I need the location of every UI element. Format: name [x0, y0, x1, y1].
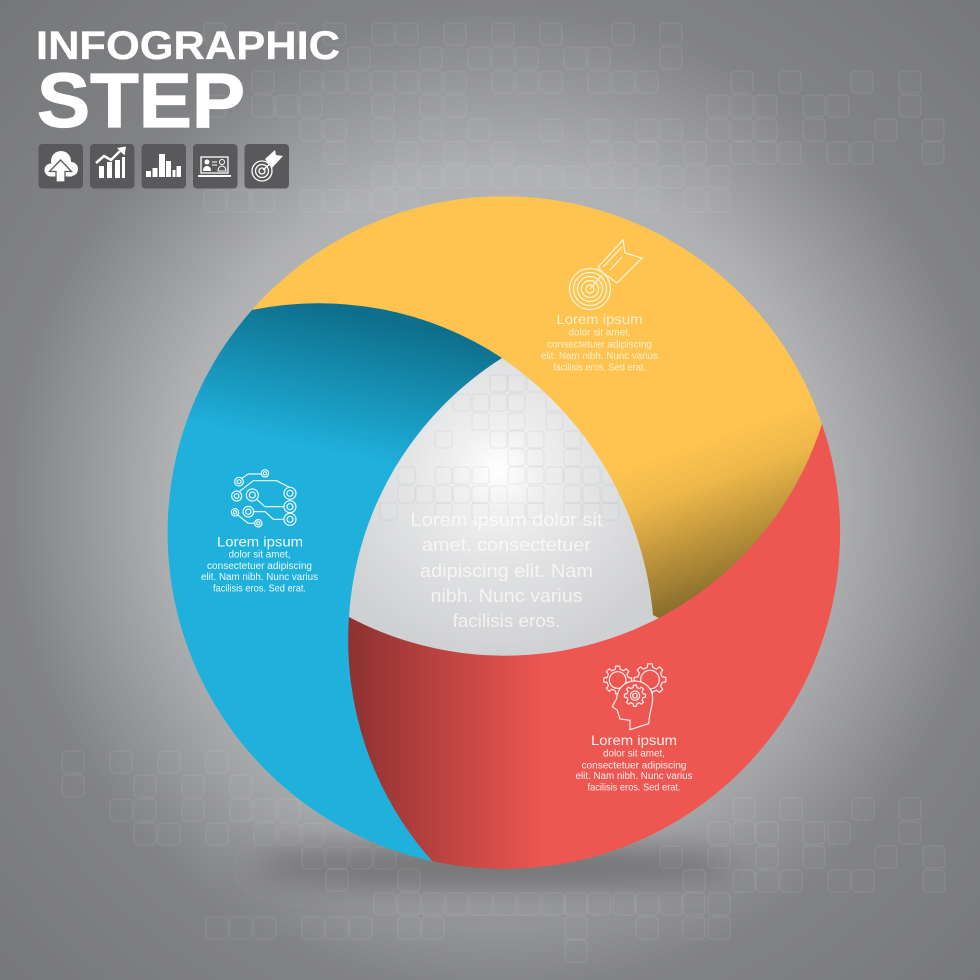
- icon: target and arrow: [570, 240, 642, 310]
- red text block: Lorem ipsum: [591, 732, 677, 748]
- tile pattern: bottom: [206, 847, 730, 962]
- icon row: [38, 144, 289, 188]
- tile pattern: upper right: [707, 71, 944, 164]
- tile pattern: lower right: [660, 798, 945, 892]
- ground shadow: [250, 846, 740, 886]
- red text block: elit. Nam nibh. Nunc varius: [576, 771, 692, 782]
- blue text block: dolor sit amet,: [228, 550, 290, 560]
- center panel: [204, 233, 804, 833]
- yellow text block: dolor sit amet,: [568, 328, 630, 338]
- panel: red segment: [348, 424, 840, 869]
- blue text block: facilisis eros. Sed erat.: [213, 584, 306, 594]
- tile pattern: lower left: [62, 751, 324, 845]
- yellow text block: consectetuer adipiscing: [547, 340, 652, 350]
- red text block: [576, 732, 692, 794]
- center text: [410, 509, 602, 631]
- center text: adipiscing elit. Nam: [420, 560, 593, 581]
- icon: bar chart: [142, 144, 186, 188]
- center text: nibh. Nunc varius: [430, 585, 582, 606]
- icon: cloud upload: [38, 144, 83, 188]
- red text block: dolor sit amet,: [603, 748, 665, 760]
- panel: yellow segment: [252, 196, 822, 640]
- red text block: facilisis eros. Sed erat.: [588, 782, 680, 794]
- center text: amet, consectetuer: [422, 534, 591, 555]
- yellow text block: facilisis eros. Sed erat.: [553, 362, 646, 374]
- icon: laptop video call: [193, 144, 238, 188]
- blue text block: Lorem ipsum: [217, 534, 303, 550]
- center text: Lorem ipsum dolor sit: [410, 509, 602, 530]
- panel: blue segment: [168, 303, 502, 861]
- center tile pattern: [380, 375, 619, 520]
- icon: head with gears: [604, 664, 666, 730]
- blue text block: consectetuer adipiscing: [207, 561, 312, 572]
- icon: growth chart: [90, 144, 134, 188]
- blue text block: [201, 534, 318, 594]
- icon: circuit: [231, 470, 296, 527]
- tile pattern: top: [204, 23, 730, 212]
- center text: facilisis eros.: [452, 610, 560, 631]
- icon: target with arrow: [244, 144, 289, 188]
- title: STEP: [37, 58, 245, 144]
- yellow text block: elit. Nam nibh. Nunc varius: [541, 351, 658, 362]
- red text block: consectetuer adipiscing: [582, 760, 686, 772]
- title: INFOGRAPHIC: [36, 24, 340, 68]
- title: [36, 24, 340, 144]
- yellow text block: Lorem ipsum: [556, 311, 642, 327]
- yellow text block: [541, 311, 658, 374]
- blue text block: elit. Nam nibh. Nunc varius: [201, 572, 318, 583]
